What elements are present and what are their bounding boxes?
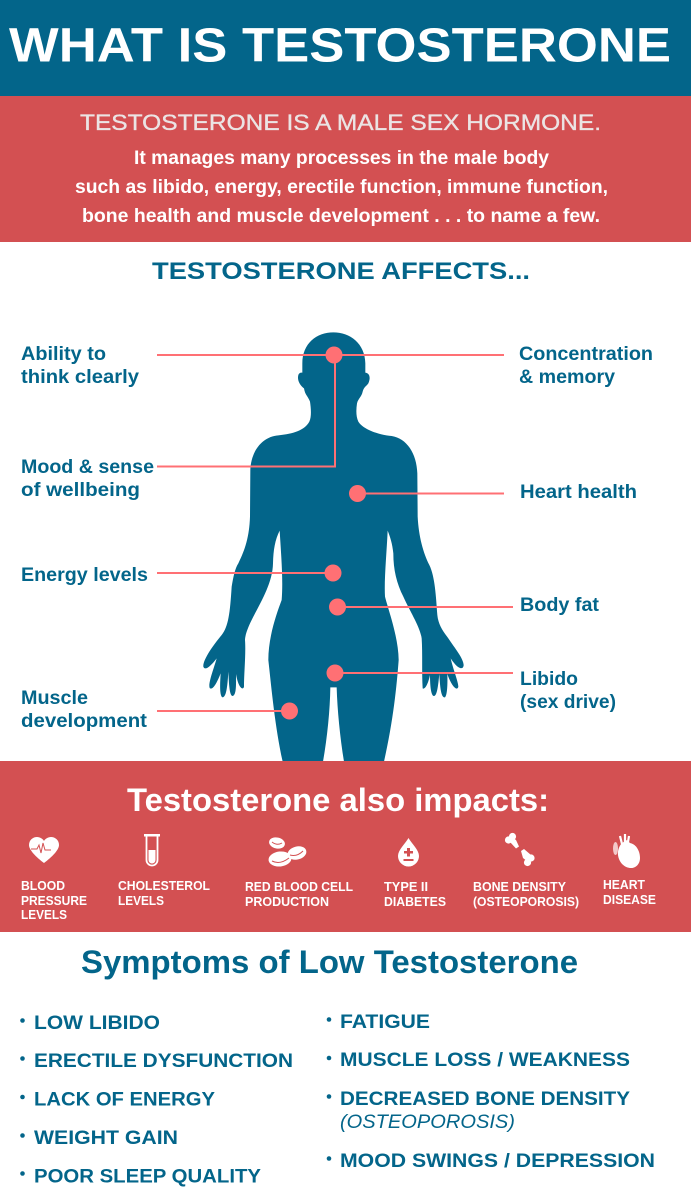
label: libido <box>520 669 616 713</box>
symptoms list: left column <box>20 1012 293 1188</box>
label: heart health: Heart health <box>520 482 637 503</box>
label: type II diabetes: DIABETES <box>384 895 446 909</box>
title banner <box>0 0 691 96</box>
label: type II diabetes <box>384 880 446 909</box>
line: libido <box>335 672 513 674</box>
line: body fat <box>338 606 513 608</box>
icon: heart with pulse <box>29 837 59 863</box>
label: muscle development <box>21 688 148 732</box>
body silhouette <box>203 332 464 762</box>
symptoms list: right column: MUSCLE LOSS / WEAKNESS <box>340 1049 630 1071</box>
impact labels <box>21 878 656 922</box>
label: mood and wellbeing: Mood & sense <box>21 457 154 478</box>
symptoms list: left column: ERECTILE DYSFUNCTION <box>34 1050 293 1072</box>
line: energy <box>157 572 333 574</box>
symptoms list: left column: WEIGHT GAIN <box>34 1127 178 1149</box>
label: muscle development: development <box>21 711 148 732</box>
label: heart disease: HEART <box>603 878 645 892</box>
label: concentration and memory: & memory <box>519 367 615 388</box>
line: muscle <box>157 710 289 712</box>
icon: anatomical heart <box>613 834 640 868</box>
panel: definition <box>0 96 691 242</box>
left labels <box>21 344 154 732</box>
heading: testosterone affects: TESTOSTERONE AFFECTS... <box>152 258 530 285</box>
symptoms list: right column <box>327 1011 655 1172</box>
label: ability to think clearly: think clearly <box>21 367 139 388</box>
label: red blood cell production: PRODUCTION <box>245 895 329 909</box>
label: muscle development: Muscle <box>21 688 88 709</box>
icon: test tube <box>144 834 160 866</box>
label: body fat: Body fat <box>520 595 600 616</box>
icon: bone <box>505 833 535 866</box>
connector lines and dots <box>157 346 513 720</box>
label: blood pressure levels: BLOOD <box>21 879 65 893</box>
symptoms list: left column: LOW LIBIDO <box>34 1012 160 1034</box>
label: bone density: (OSTEOPOROSIS) <box>473 895 579 909</box>
label: concentration and memory <box>519 344 653 388</box>
label: type II diabetes: TYPE II <box>384 880 428 894</box>
definition heading: TESTOSTERONE IS A MALE SEX HORMONE. <box>80 110 601 135</box>
label: blood pressure levels: LEVELS <box>21 908 67 922</box>
panel: also impacts <box>0 761 691 932</box>
symptoms list: right column: (OSTEOPOROSIS) <box>340 1111 515 1133</box>
symptoms list: right column: DECREASED BONE DENSITY <box>340 1088 630 1110</box>
line: heart <box>358 492 504 494</box>
label: libido: (sex drive) <box>520 692 616 713</box>
label: libido: Libido <box>520 669 578 690</box>
label: bone density <box>473 880 579 909</box>
title: WHAT IS TESTOSTERONE <box>9 20 671 72</box>
symptoms list: left column: LACK OF ENERGY <box>34 1088 215 1110</box>
definition text: It manages many processes in the male body <box>134 148 549 169</box>
label: red blood cell production <box>245 880 353 909</box>
label: mood and wellbeing: of wellbeing <box>21 480 140 501</box>
definition text <box>75 148 608 227</box>
definition text: bone health and muscle development . . . to name a few. <box>82 206 600 227</box>
label: cholesterol levels: CHOLESTEROL <box>118 879 210 893</box>
label: blood pressure levels: PRESSURE <box>21 894 87 908</box>
label: heart disease: DISEASE <box>603 893 656 907</box>
impacts heading: Testosterone also impacts: <box>127 782 549 818</box>
heading: symptoms: Symptoms of Low Testosterone <box>81 944 578 980</box>
definition text: such as libido, energy, erectile function, immune function, <box>75 177 608 198</box>
label: concentration and memory: Concentration <box>519 344 653 365</box>
symptoms list: right column: MOOD SWINGS / DEPRESSION <box>340 1150 655 1172</box>
label: ability to think clearly <box>21 344 139 388</box>
label: red blood cell production: RED BLOOD CELL <box>245 880 353 894</box>
label: bone density: BONE DENSITY <box>473 880 567 894</box>
icon: blood drop with plus and minus <box>398 838 419 866</box>
label: heart disease <box>603 878 656 907</box>
label: cholesterol levels: LEVELS <box>118 894 164 908</box>
line: mood <box>157 355 335 466</box>
line: brain <box>157 354 504 356</box>
label: mood and wellbeing <box>21 457 154 501</box>
label: ability to think clearly: Ability to <box>21 344 106 365</box>
symptoms list: right column: FATIGUE <box>340 1011 430 1033</box>
label: blood pressure levels <box>21 879 87 922</box>
dots <box>281 346 366 720</box>
label: energy levels: Energy levels <box>21 565 148 586</box>
icon: red blood cells <box>268 836 308 868</box>
label: cholesterol levels <box>118 879 210 908</box>
right labels <box>519 344 653 713</box>
symptoms list: left column: POOR SLEEP QUALITY <box>34 1166 261 1188</box>
